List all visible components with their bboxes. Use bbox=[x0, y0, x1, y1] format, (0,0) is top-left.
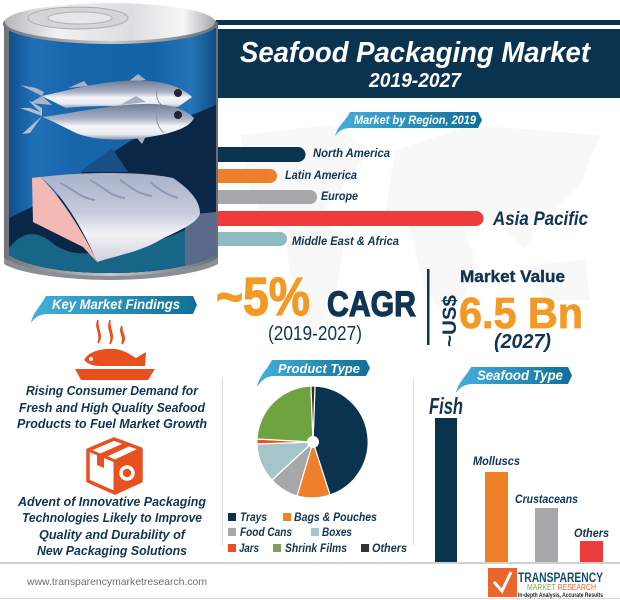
label: others: Others bbox=[574, 526, 609, 540]
pie legend: Boxes bbox=[322, 525, 352, 539]
bar: North America bbox=[210, 147, 306, 162]
market value heading: Market Value bbox=[460, 267, 565, 286]
world map background bbox=[240, 125, 600, 345]
finding text 2: Quality and Durability of bbox=[39, 527, 187, 542]
finding text 2: Technologies Likely to Improve bbox=[22, 510, 202, 525]
pie legend: Others bbox=[372, 541, 407, 555]
fish fillet bbox=[32, 173, 200, 262]
finding text 1: Rising Consumer Demand for bbox=[26, 383, 199, 398]
icon: package with gear bbox=[88, 439, 141, 493]
slice: bags and pouches bbox=[297, 442, 330, 498]
currency prefix: ~US$ bbox=[440, 295, 461, 347]
icon: hot fish on plate bbox=[75, 320, 155, 380]
CAGR stat bbox=[216, 267, 416, 345]
bar: molluscs bbox=[485, 472, 508, 562]
pie legend: Trays bbox=[240, 510, 267, 524]
ribbon: seafood type: Seafood Type bbox=[477, 368, 563, 383]
CAGR percent: ~5% bbox=[216, 267, 310, 327]
slice: others bbox=[311, 386, 315, 442]
pie legend: Bags & Pouches bbox=[294, 510, 377, 524]
bar: Middle East and Africa bbox=[210, 232, 287, 246]
ribbon: seafood type bbox=[456, 367, 572, 393]
market value year: (2027) bbox=[494, 331, 551, 353]
can lid bbox=[3, 4, 217, 44]
bar: Latin America bbox=[210, 169, 277, 183]
label: Europe: Europe bbox=[321, 189, 358, 203]
waves bbox=[9, 222, 216, 273]
label: Asia Pacific: Asia Pacific bbox=[492, 209, 588, 230]
ribbon: product type: Product Type bbox=[278, 361, 360, 376]
market value stat bbox=[440, 267, 583, 353]
label: molluscs: Molluscs bbox=[473, 454, 520, 468]
finding text 1 bbox=[17, 383, 207, 431]
ribbon: product type bbox=[257, 360, 370, 387]
title: Seafood Packaging Market bbox=[240, 37, 591, 69]
label: fish: Fish bbox=[429, 393, 463, 419]
top stripe bbox=[216, 20, 620, 25]
fish bottom bbox=[20, 96, 194, 144]
slice: jars bbox=[257, 439, 313, 444]
pie chart: product type bbox=[257, 386, 368, 498]
pie legend bbox=[228, 510, 407, 555]
bar chart: market by region bbox=[210, 146, 588, 248]
logo tagline: In-depth Analysis, Accurate Results bbox=[518, 593, 604, 599]
slice: shrink films bbox=[257, 386, 313, 442]
market value figure: 6.5 Bn bbox=[459, 289, 583, 338]
finding text 2 bbox=[17, 494, 206, 558]
can illustration bbox=[3, 3, 218, 280]
ribbon: key market findings bbox=[31, 296, 197, 323]
pie legend: Jars bbox=[239, 541, 259, 555]
ribbon: market by region bbox=[335, 112, 482, 136]
logo mark bbox=[488, 568, 517, 597]
finding text 2: Advent of Innovative Packaging bbox=[17, 494, 206, 509]
slice: trays bbox=[313, 386, 368, 495]
logo bbox=[488, 568, 604, 599]
pie legend: Food Cans bbox=[240, 525, 292, 539]
title band bbox=[216, 29, 620, 98]
fish top bbox=[20, 74, 192, 108]
CAGR word: CAGR bbox=[327, 285, 416, 324]
ribbon: key market findings: Key Market Findings bbox=[52, 296, 180, 312]
ribbon: market by region: Market by Region, 2019 bbox=[354, 115, 477, 127]
label: crustaceans: Crustaceans bbox=[515, 492, 578, 506]
slice: boxes bbox=[257, 442, 313, 480]
bar: fish bbox=[435, 418, 457, 562]
pie legend: Shrink Films bbox=[285, 541, 347, 555]
finding text 1: Products to Fuel Market Growth bbox=[17, 416, 207, 431]
slice: food cans bbox=[272, 442, 313, 496]
can body bbox=[4, 22, 218, 278]
finding text 1: Fresh and High Quality Seafood bbox=[19, 400, 206, 415]
label: Middle East and Africa: Middle East & Africa bbox=[292, 234, 399, 248]
bar: others bbox=[580, 541, 603, 562]
title years: 2019-2027 bbox=[368, 70, 462, 92]
bar: Asia Pacific bbox=[210, 211, 484, 226]
bar chart: seafood type bbox=[429, 393, 609, 562]
bar: crustaceans bbox=[535, 508, 558, 562]
CAGR years: (2019-2027) bbox=[268, 323, 362, 345]
website url: www.transparencymarketresearch.com bbox=[26, 576, 207, 588]
can bottom rim bbox=[4, 258, 218, 280]
logo market research: MARKET RESEARCH bbox=[527, 583, 596, 592]
label: North America: North America bbox=[313, 146, 390, 160]
label: Latin America: Latin America bbox=[285, 168, 357, 182]
bar: Europe bbox=[210, 190, 317, 204]
finding text 2: New Packaging Solutions bbox=[37, 543, 187, 558]
dark background shape bbox=[9, 105, 216, 273]
